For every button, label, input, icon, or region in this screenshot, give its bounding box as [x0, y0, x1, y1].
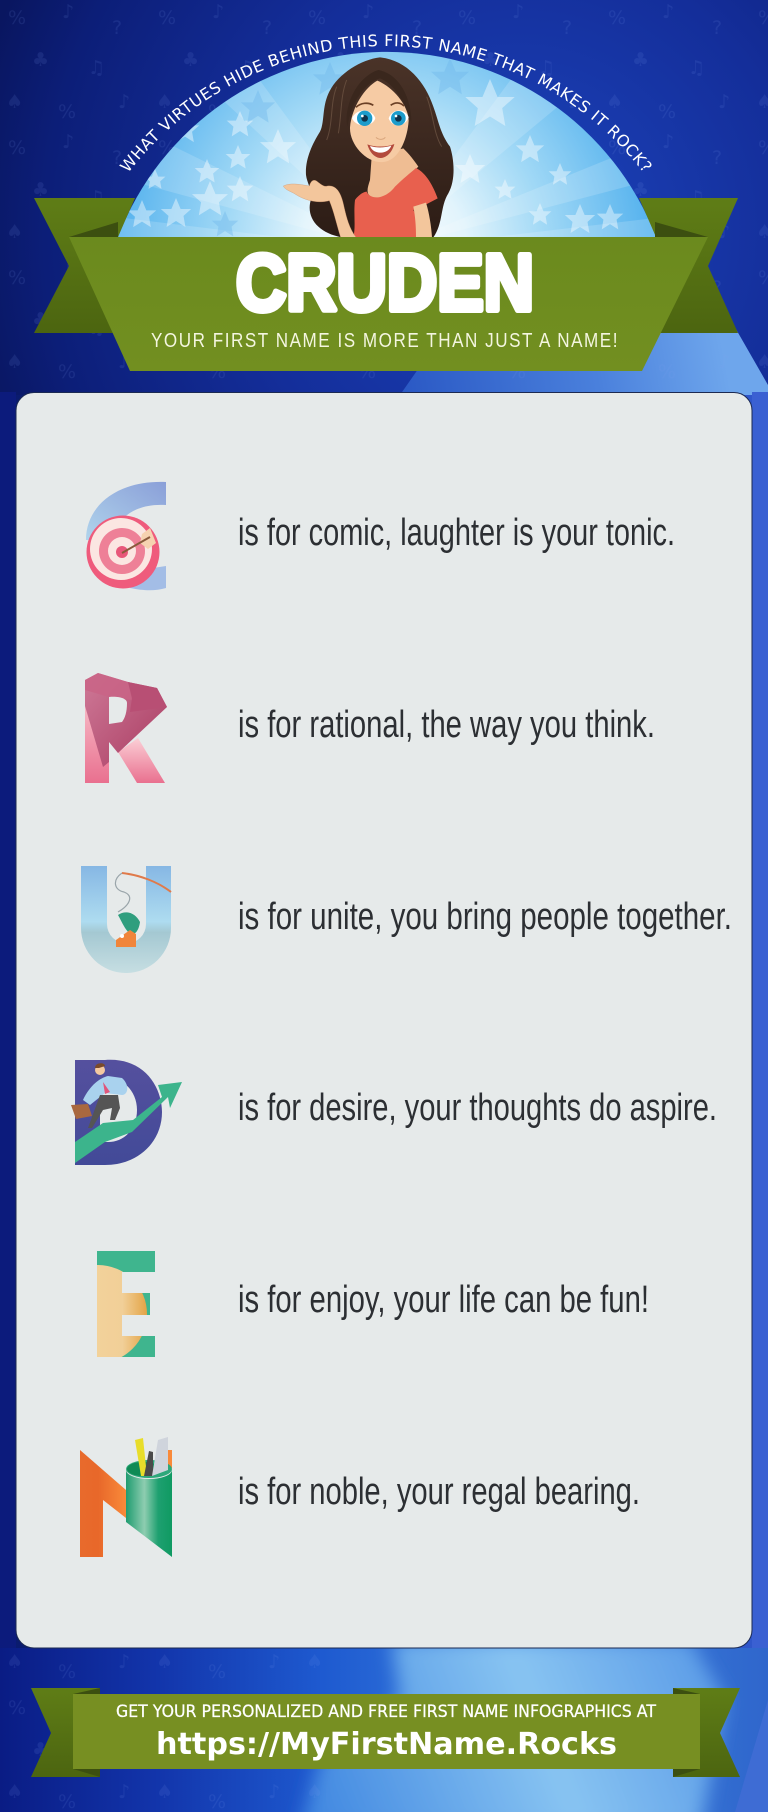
- arm right: [413, 203, 432, 237]
- text: R line: is for rational, the way you think.: [238, 704, 655, 746]
- face: [350, 81, 409, 162]
- icon: letter D with man on arrow: [71, 1060, 182, 1165]
- footer url: https://MyFirstName.Rocks: [156, 1727, 617, 1762]
- text: N line: is for noble, your regal bearing.: [238, 1471, 640, 1513]
- subtitle: YOUR FIRST NAME IS MORE THAN JUST A NAME!: [151, 330, 619, 352]
- icon: letter R with gem: [85, 673, 167, 783]
- arm left with hand: [283, 180, 356, 237]
- text: E line: is for enjoy, your life can be fun!: [238, 1279, 649, 1321]
- icon: letter U with fish: [81, 866, 171, 973]
- curved tagline: WHAT VIRTUES HIDE BEHIND THIS FIRST NAME THAT MAKES IT ROCK?: [119, 34, 652, 171]
- brows: [356, 103, 373, 107]
- character: smiling woman: [283, 57, 454, 237]
- header dome with stars: [118, 52, 655, 237]
- mouth: [367, 144, 394, 158]
- hair: [306, 57, 454, 237]
- title: CRUDEN: [236, 238, 534, 327]
- left ribbon tail: [34, 198, 135, 333]
- icon: letter E with orange: [97, 1251, 155, 1357]
- shirt: [353, 168, 438, 237]
- neck and chest: [368, 148, 418, 198]
- hair parting: [347, 70, 411, 127]
- main ribbon: [69, 237, 708, 371]
- footer call to action: GET YOUR PERSONALIZED AND FREE FIRST NAME INFOGRAPHICS AT: [116, 1702, 657, 1722]
- footer banner: [31, 1688, 740, 1777]
- nose: [376, 137, 385, 139]
- panel: name letters card: [16, 392, 752, 1648]
- eyes: [352, 111, 375, 125]
- right ribbon tail: [639, 198, 738, 333]
- icon: letter C with target: [86, 482, 166, 590]
- icon: letter N with pencil cup: [80, 1437, 172, 1557]
